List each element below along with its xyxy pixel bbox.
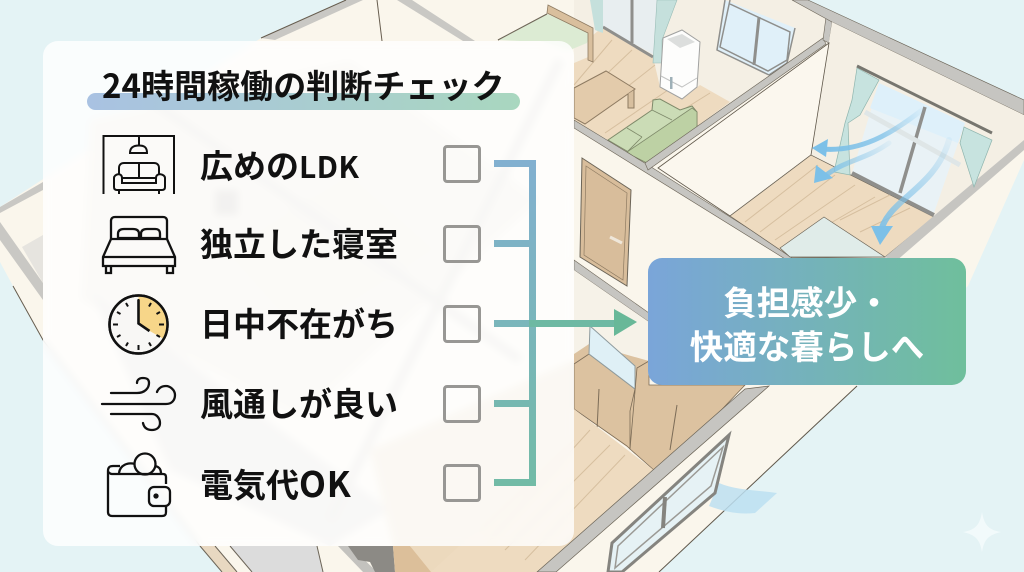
text: 風通しが良い: 風通しが良い [200, 378, 398, 426]
checkbox 2 [443, 225, 481, 263]
checkbox 1 [443, 145, 481, 183]
airflow arrows [812, 110, 949, 245]
lower floor [431, 409, 655, 572]
bed in upper room [498, 5, 593, 62]
cabinets base [574, 344, 745, 471]
upper room back wall [574, 0, 826, 165]
checkbox 4 [443, 385, 481, 423]
text: 広めのLDK: 広めのLDK [200, 140, 359, 188]
upper room floor [574, 27, 730, 163]
dehumidifier [660, 30, 700, 99]
text: 電気代OK: 電気代OK [200, 457, 352, 508]
upper right window [717, 0, 795, 75]
text: 独立した寝室: 独立した寝室 [200, 218, 398, 266]
callout: result [648, 258, 966, 385]
airflow swoosh at front [709, 483, 777, 513]
green sofa [608, 99, 697, 163]
front window [608, 435, 729, 572]
text: 日中不在がち: 日中不在がち [200, 298, 398, 346]
coffee table [574, 71, 635, 124]
callout: result: 快適な暮らしへ [690, 320, 924, 369]
heading: title: 24時間稼働の判断チェック [102, 60, 505, 108]
door [580, 158, 631, 286]
lower room wall [574, 270, 649, 361]
partition wall [658, 43, 829, 216]
right room window and curtains [834, 66, 992, 215]
left cabinets [574, 354, 635, 449]
upper sliding window [590, 0, 677, 63]
tall cabinet [630, 361, 745, 471]
sparkle [963, 512, 1001, 552]
panel: check list card [43, 41, 574, 546]
kitchen window glass [589, 326, 635, 389]
outer wall line [659, 386, 857, 572]
title highlight bar [87, 93, 520, 110]
left floor triangle [22, 235, 43, 283]
right room back wall [811, 22, 1024, 257]
bottom floor strip [200, 546, 574, 572]
callout: result: 負担感少・ [723, 276, 891, 325]
right room floor [730, 140, 1024, 262]
structural grey bands [574, 0, 1024, 322]
checkbox 3 [443, 305, 481, 343]
lower front band [537, 386, 769, 572]
hidden left floors under panel [80, 60, 574, 546]
left room roofline bands [0, 0, 475, 300]
checkbox 5 [443, 464, 481, 502]
